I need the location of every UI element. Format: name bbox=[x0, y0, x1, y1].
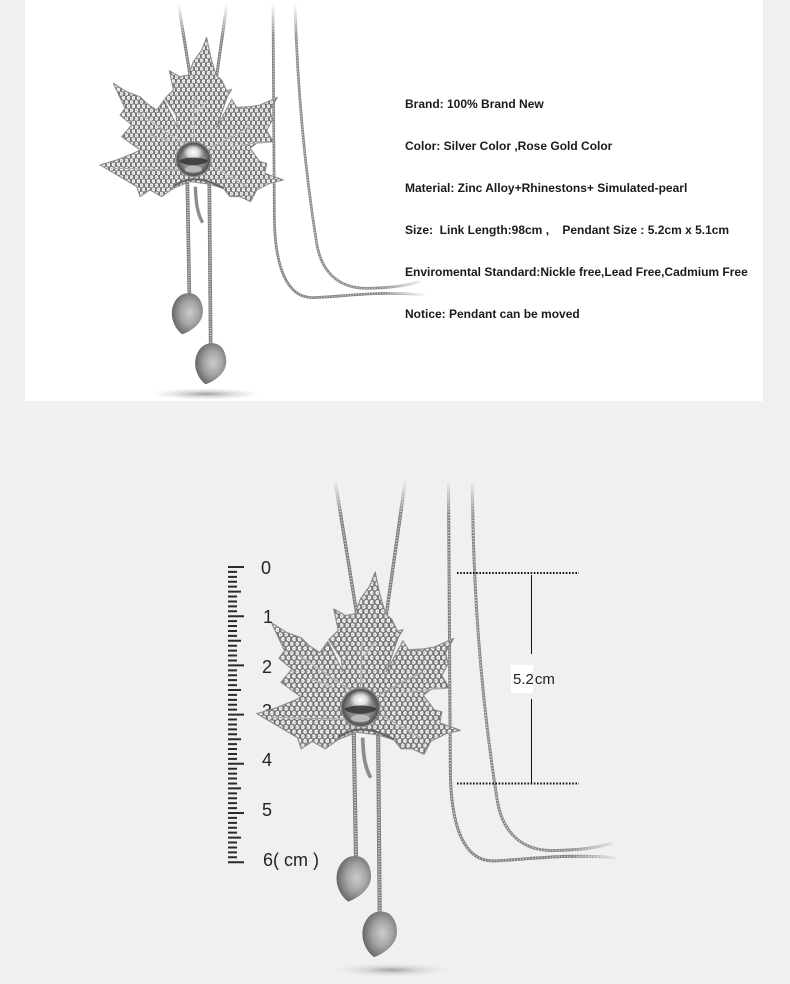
ruler numbers: 3 bbox=[262, 701, 272, 721]
ruler numbers: 6( cm ) bbox=[263, 850, 319, 870]
ruler numbers: 4 bbox=[262, 750, 272, 770]
ruler numbers: 5 bbox=[262, 800, 272, 820]
dimension bracket: 5.2cm height bbox=[457, 573, 579, 784]
text: material spec: Material: Zinc Alloy+Rhinestons+ Simulated-pearl bbox=[405, 181, 687, 195]
ruler numbers bbox=[261, 558, 319, 870]
ruler scale bbox=[228, 567, 244, 862]
text: size spec: Size: Link Length:98cm , Pendant Size : 5.2cm x 5.1cm bbox=[405, 223, 729, 237]
dimension bracket: 5.2cm height: 5.2cm bbox=[513, 671, 555, 688]
text: brand spec: Brand: 100% Brand New bbox=[405, 97, 544, 111]
necklace photo: lower panel bbox=[257, 479, 618, 957]
ruler numbers: 1 bbox=[263, 607, 273, 627]
shadow: top necklace bbox=[150, 388, 262, 400]
illustration layer: necklaces, ruler and dimension marks bbox=[100, 6, 616, 975]
shadow: lower necklace bbox=[334, 963, 450, 977]
ruler numbers: 2 bbox=[262, 657, 272, 677]
text: environmental standard spec: Enviromental Standard:Nickle free,Lead Free,Cadmium Free bbox=[405, 265, 748, 279]
panel: white product panel bbox=[25, 0, 763, 401]
text: notice: Notice: Pendant can be moved bbox=[405, 307, 580, 321]
necklace photo: top panel bbox=[100, 0, 425, 384]
text: color spec: Color: Silver Color ,Rose Gold Color bbox=[405, 139, 612, 153]
ruler numbers: 0 bbox=[261, 558, 271, 578]
